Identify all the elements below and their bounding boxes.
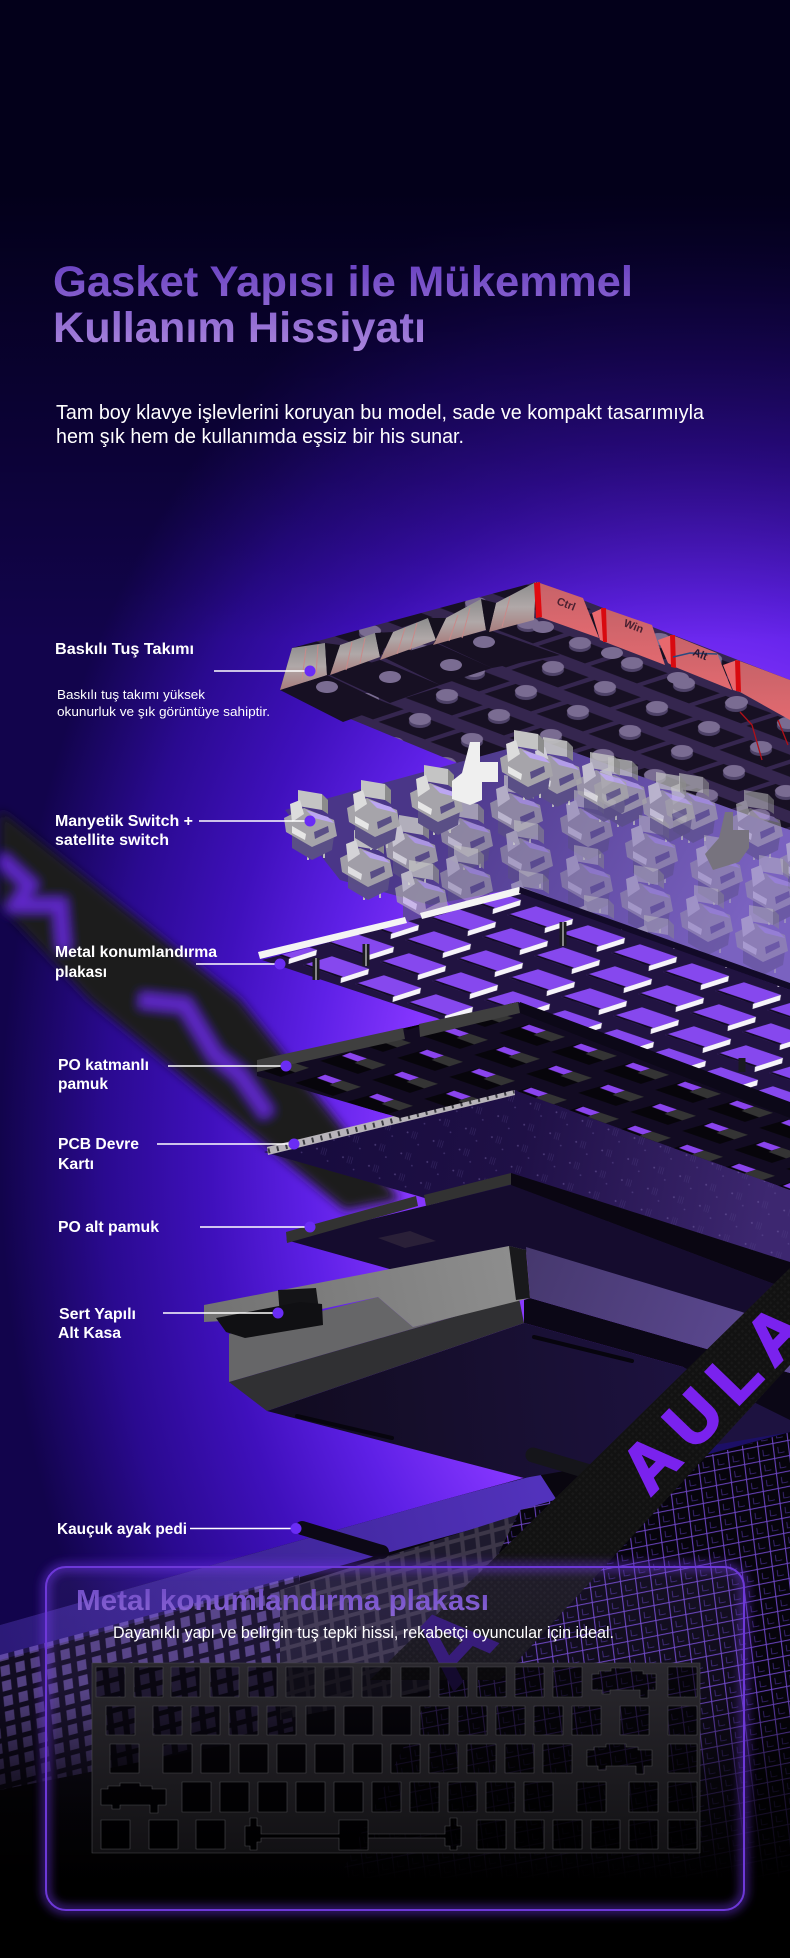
slots <box>297 1416 392 1438</box>
panel: metal positioning plate <box>46 1567 744 1910</box>
red keycaps: Alt <box>691 647 709 663</box>
label: hard case: Alt Kasa <box>58 1325 121 1342</box>
plate diagram <box>92 1663 700 1853</box>
black floor <box>0 1878 790 1958</box>
title: Gasket Yapısı ile Mükemmel <box>53 258 633 306</box>
metal plate <box>258 887 790 1180</box>
label: printed keycaps <box>55 641 316 719</box>
top dark overlay <box>0 0 790 640</box>
blurred background strap with logo <box>0 810 400 1210</box>
red keycaps <box>534 582 790 760</box>
label: hard case: Sert Yapılı <box>59 1306 136 1323</box>
front strap with logo: A <box>386 1580 517 1709</box>
label: PO bottom foam <box>58 1219 316 1236</box>
panel dimming behind plate <box>92 1663 700 1853</box>
PO foam layer <box>257 1002 790 1190</box>
bracket <box>278 1288 319 1316</box>
label: hard case <box>58 1306 284 1342</box>
label: printed keycaps: Baskılı Tuş Takımı <box>55 641 194 658</box>
label: PCB <box>58 1136 300 1173</box>
label: magnetic switch <box>55 813 316 849</box>
label: PCB: PCB Devre <box>58 1136 139 1153</box>
label: PO foam: pamuk <box>58 1076 108 1093</box>
front strap with logo <box>370 1268 790 1709</box>
mat surface and mesh <box>0 1390 790 1958</box>
label: metal plate <box>55 944 286 981</box>
panel heading: Metal konumlandırma plakası <box>76 1585 489 1617</box>
intro text: hem şık hem de kullanımda eşsiz bir his sunar. <box>56 426 464 448</box>
title: Kullanım Hissiyatı <box>53 304 426 352</box>
label: PO foam <box>58 1057 292 1093</box>
label: PCB: Kartı <box>58 1156 94 1173</box>
grey keycaps <box>280 582 536 690</box>
label: printed keycaps: okunurluk ve şık görüntüye sahiptir. <box>57 704 270 719</box>
intro text <box>56 402 705 448</box>
label: printed keycaps: Baskılı tuş takımı yüksek <box>57 687 206 702</box>
hard bottom case <box>204 1246 790 1478</box>
label: magnetic switch: Manyetik Switch + <box>55 813 193 830</box>
label: metal plate: plakası <box>55 964 107 981</box>
bottom fade to black <box>0 1690 790 1880</box>
PCB board <box>264 1087 790 1310</box>
label: metal plate: Metal konumlandırma <box>55 944 217 961</box>
label: rubber foot: Kauçuk ayak pedi <box>57 1521 187 1538</box>
PO bottom foam <box>286 1173 790 1350</box>
red keycaps: Win <box>622 618 645 636</box>
panel description: Dayanıklı yapı ve belirgin tuş tepki hissi, rekabetçi oyuncular için ideal. <box>113 1624 614 1642</box>
stems on the front row <box>316 621 748 708</box>
rubber feet <box>302 1455 590 1552</box>
label: magnetic switch: satellite switch <box>55 832 169 849</box>
intro text: Tam boy klavye işlevlerini koruyan bu model, sade ve kompakt tasarımıyla <box>56 402 705 424</box>
red keycaps: Ctrl <box>555 596 577 614</box>
label: rubber foot <box>57 1521 302 1538</box>
switch layer <box>284 730 790 987</box>
label: PO bottom foam: PO alt pamuk <box>58 1219 159 1236</box>
title <box>53 258 633 352</box>
label: PO foam: PO katmanlı <box>58 1057 149 1074</box>
keycap layer <box>280 582 790 900</box>
white stabilizer cross <box>452 742 498 805</box>
